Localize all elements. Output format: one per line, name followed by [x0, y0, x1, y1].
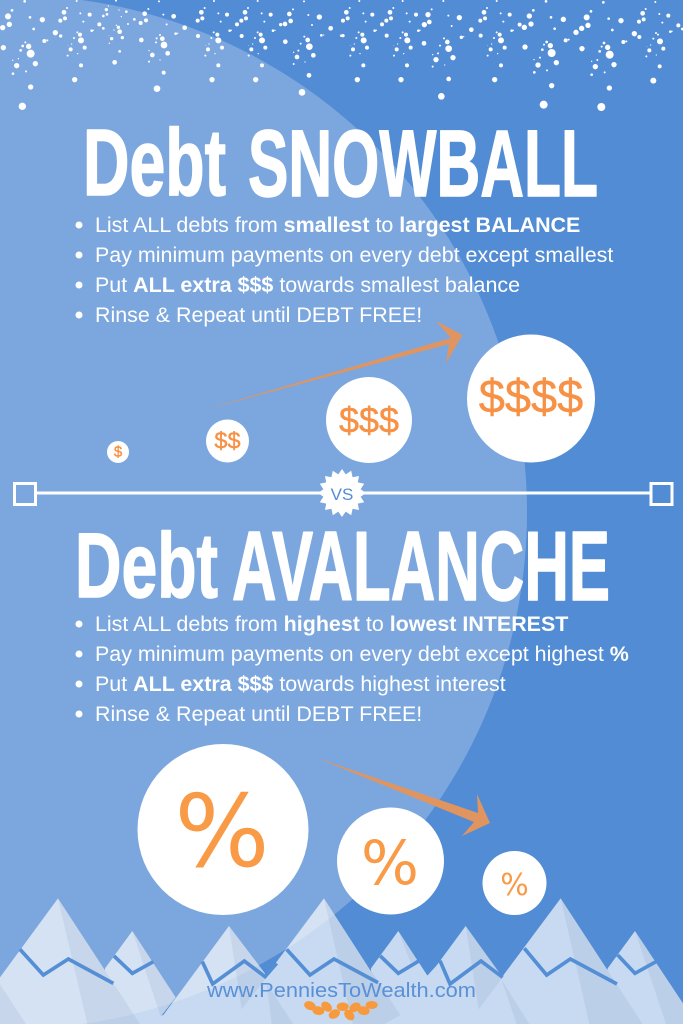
title: Debt Avalanche	[75, 511, 610, 621]
snowball steps list	[76, 213, 613, 327]
avalanche steps list	[76, 612, 629, 726]
circle: $$$	[326, 377, 412, 463]
circle: $$: $$	[214, 428, 241, 454]
website address: www.PenniesToWealth.com	[206, 979, 476, 1002]
light background circle	[0, 0, 527, 1024]
circle: medium %: %	[361, 828, 419, 899]
circle: small %: %	[500, 868, 529, 903]
versus divider: VS	[331, 485, 353, 504]
icon: pile of orange coins	[303, 999, 378, 1022]
snowball steps list: Pay minimum payments on every debt except smallest	[95, 243, 613, 267]
snowball steps list: List ALL debts from smallest to largest BALANCE	[95, 213, 580, 237]
circle: $	[107, 441, 129, 463]
circle: large %: %	[174, 773, 270, 890]
circle: large %	[138, 744, 308, 915]
mountain range	[0, 898, 683, 1024]
circle: small %	[482, 851, 546, 915]
avalanche steps list: List ALL debts from highest to lowest INTEREST	[95, 612, 568, 636]
circle: $$	[206, 420, 249, 462]
circle: $$$$: $$$$	[479, 370, 583, 422]
arrow: rising snowball	[207, 321, 462, 409]
falling snow dots	[0, 0, 683, 111]
versus divider	[14, 469, 672, 517]
arrow: falling avalanche	[317, 758, 490, 836]
snowball steps list: Rinse & Repeat until DEBT FREE!	[95, 303, 422, 327]
avalanche steps list: Put ALL extra $$$ towards highest interest	[95, 672, 506, 696]
avalanche steps list: Rinse & Repeat until DEBT FREE!	[95, 702, 422, 726]
circle: $$$: $$$	[339, 400, 399, 440]
circle: medium %	[337, 808, 444, 914]
snowball steps list: Put ALL extra $$$ towards smallest balance	[95, 273, 520, 297]
title: Debt Snowball: Debt	[83, 110, 226, 216]
circle: $$$$	[467, 334, 595, 462]
avalanche steps list: Pay minimum payments on every debt except highest %	[95, 642, 629, 666]
title: Debt Avalanche: Debt	[75, 515, 218, 617]
title: Debt Snowball	[83, 110, 598, 217]
circle: $: $	[114, 444, 123, 460]
